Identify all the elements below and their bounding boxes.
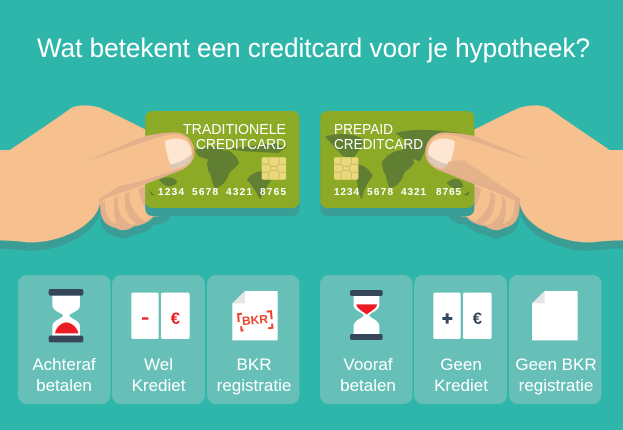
card number: 1234 [334,187,359,198]
label [340,355,396,395]
label: registratie [519,376,593,395]
icon: blank document [532,291,578,340]
right hand back and fingers [449,105,623,251]
label [434,355,488,395]
label: Vooraf [343,355,393,374]
icon: hourglass bottom filled [49,289,83,342]
left hand back and fingers [0,105,171,251]
traditional credit card [145,111,299,216]
card number: 8765 [436,187,461,198]
label [132,355,186,395]
card number: 4321 [226,187,252,198]
card number [158,187,286,198]
label: Achteraf [32,355,96,374]
card number: 4321 [401,187,426,198]
right hand holding prepaid credit card [320,105,623,251]
chip [262,157,286,180]
label: Krediet [132,376,186,395]
card title: CREDITCARD [196,137,286,153]
panel: bkr registratie [207,275,300,404]
card title: PREPAID [334,122,393,138]
label: BKR [237,355,271,374]
chip [334,157,358,180]
label [32,355,96,395]
left hand holding traditional credit card [0,105,299,251]
label: Wel [144,355,173,374]
world map [325,130,470,200]
label [217,355,291,395]
label: betalen [36,376,92,395]
label: Geen BKR [515,355,597,374]
panel: geen krediet [414,275,507,404]
label: Geen [440,355,482,374]
card number: 5678 [192,187,218,198]
icon: hourglass top filled [350,290,383,340]
card number: 5678 [367,187,393,198]
card number: 8765 [260,187,286,198]
icon: minus euro cards: € [171,309,180,328]
label: Krediet [434,376,488,395]
label: registratie [217,376,291,395]
icon: document with BKR stamp: BKR [241,312,269,328]
card title: CREDITCARD [334,137,423,153]
card number: 1234 [158,187,184,198]
card number [334,187,461,198]
panel: wel krediet [112,275,205,404]
panel: vooraf betalen [320,275,412,404]
label [515,355,597,395]
panel: achteraf betalen [18,275,110,404]
world map [148,143,287,200]
title: Wat betekent een creditcard voor je hypotheek? [37,33,590,63]
icon: plus euro cards: € [473,309,482,328]
right thumb [425,132,535,203]
panel: geen bkr registratie [509,275,602,404]
card title [183,122,286,153]
label: betalen [340,376,396,395]
left thumb [85,132,194,203]
card title: TRADITIONELE [183,122,286,138]
prepaid credit card [320,111,474,216]
card title [334,122,423,153]
